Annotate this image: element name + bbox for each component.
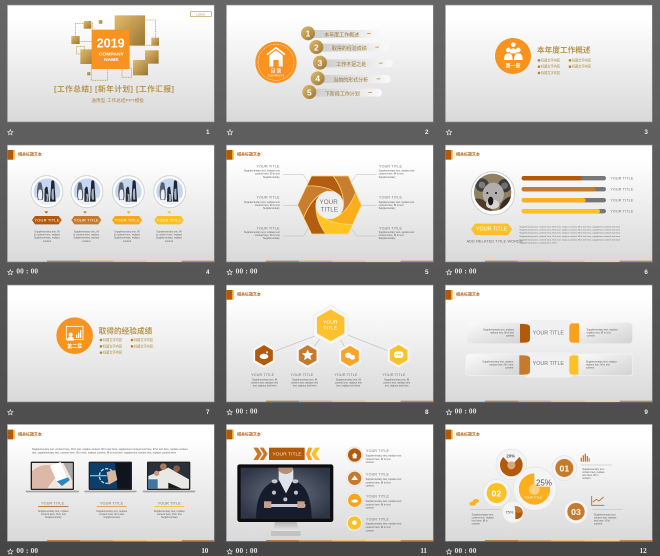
icon list: content here, fill in text: [366, 503, 391, 506]
slide 4: four penguin circles: 4: [206, 269, 210, 276]
slide header: 相关标题文本: [456, 291, 480, 297]
slide header: 相关标题文本: [237, 151, 261, 157]
right labels: Supplementary: [379, 176, 396, 179]
connector lines: [283, 175, 377, 236]
slide 6: koala and progress bars: 00 : 00: [455, 267, 477, 276]
title badges: YOUR TITLE: [156, 218, 182, 223]
badge 03: 03: [571, 507, 581, 517]
description text: Supplementary text, fill: [114, 231, 140, 234]
bottom row panels: replace text, fill in text: [489, 363, 514, 366]
title badges: YOUR TITLE: [74, 218, 99, 223]
logo tag: LOGO: [196, 12, 206, 16]
child labels: content text, replace text: [383, 382, 410, 385]
slide 7: chapter two: [7, 285, 214, 416]
75 percent pie: 75%: [505, 509, 514, 514]
cover subtitle: 通用型·工作总结PPT模板: [91, 97, 144, 104]
cover title: [工作总结] [新年计划] [工作汇报]: [54, 83, 174, 93]
text block 02: content: [472, 523, 480, 526]
chapter bullet list: 标题文字内容: [103, 337, 123, 342]
slide header: [445, 150, 480, 160]
25 percent pie: [513, 467, 557, 510]
add related title text: ADD RELATED TITLE WORDS: [467, 240, 523, 244]
description text: Supplementary, replace: [114, 237, 141, 240]
child labels: YOUR TITLE: [334, 373, 358, 377]
child labels: [251, 373, 410, 388]
center title: YOUR: [320, 199, 338, 206]
orange cover square with year: [92, 30, 130, 69]
text block 01: text here, fill in: [582, 474, 599, 477]
laptop captions: Supplementary text, replace: [154, 510, 185, 513]
left labels: Supplementary: [263, 207, 280, 210]
text block 01: [581, 465, 612, 480]
bottom row panels: content: [586, 367, 594, 370]
chapter bullet list: 标题文字内容: [134, 343, 154, 348]
progress bars: [522, 176, 634, 214]
slide header: 相关标题文本: [18, 151, 42, 157]
list of contents: 工作不足之处: [336, 61, 366, 68]
bottom row panels: YOUR TITLE: [533, 361, 564, 367]
text block 03: [592, 509, 623, 526]
slide header: [445, 290, 480, 300]
right labels: [379, 164, 415, 240]
chapter bullet list: [538, 57, 592, 75]
slide 7: chapter two: 7: [206, 409, 210, 416]
top row panels: Supplementary text, replace: [587, 328, 618, 331]
text block 03: content: [594, 523, 602, 526]
list of contents: 下阶段工作计划: [325, 90, 360, 97]
description text: in content here, replace: [34, 234, 61, 237]
child labels: content text, replace text: [251, 382, 279, 385]
icon list: content: [366, 529, 374, 532]
slide 10: three laptops: 00 : 00: [16, 546, 38, 555]
right labels: Supplementary text, replace text: [379, 201, 415, 204]
laptop captions: Supplementary: [45, 516, 62, 519]
right labels: YOUR TITLE: [379, 164, 403, 168]
icon list: content here, fill in text: [366, 526, 391, 529]
slide 9: paired panels: 00 : 00: [455, 407, 477, 416]
slide 4: four penguin circles: 00 : 00: [16, 267, 38, 276]
slide header: 相关标题文本: [456, 430, 480, 436]
laptop captions: [38, 501, 185, 519]
child labels: text, replace text here: [385, 385, 409, 388]
description text: content: [165, 240, 173, 243]
yellow title badge: [471, 224, 512, 235]
child labels: text, replace text here: [253, 385, 277, 388]
list of contents: 当前的形式分析: [333, 77, 368, 84]
laptop 3: [143, 462, 195, 492]
child labels: text, replace text here: [293, 385, 317, 388]
25 percent pie: 25%: [536, 478, 552, 487]
chapter bullet list: [100, 337, 154, 355]
description text: content: [43, 240, 51, 243]
icon list: content: [366, 507, 374, 510]
slide 11: monitor and list: [226, 424, 433, 555]
center title: TITLE: [321, 207, 338, 214]
laptop captions: Supplementary text, replace: [38, 510, 69, 513]
paragraph: [519, 225, 621, 245]
slide 10: three laptops: [7, 424, 214, 555]
title badges: YOUR TITLE: [114, 218, 140, 223]
slide header: 相关标题文本: [237, 291, 261, 297]
icon list: Supplementary text, replace text: [366, 500, 402, 503]
contents badge with house icon: 目 录: [271, 68, 282, 75]
left labels: YOUR TITLE: [257, 196, 280, 200]
chapter bullet list: 标题文字内容: [541, 64, 561, 69]
logo tag: [190, 12, 211, 17]
list of contents: 取得的经验成绩: [332, 45, 367, 52]
chapter title: 取得的经验成绩: [99, 326, 153, 336]
laptop captions: YOUR TITLE: [100, 501, 124, 505]
icon list: [346, 447, 402, 532]
right labels: Supplementary: [379, 237, 396, 240]
slide 4: four penguin circles: [7, 145, 214, 276]
slide header: [7, 430, 42, 439]
slide 9: paired panels: [445, 285, 652, 416]
badge 01: [552, 456, 577, 480]
laptop 1: [26, 462, 79, 492]
intro paragraph: text, supplementary text, content here, fill in text, replace content, fill in text here, supplement content text, replace content here: [32, 451, 177, 454]
slide 5: pinwheel hexagon: 5: [425, 269, 429, 276]
laptop captions: content here, fill in text: [41, 513, 66, 516]
top row panels: YOUR TITLE: [533, 330, 564, 336]
slide 12: circle charts: [445, 424, 652, 555]
chapter bullet list: 标题文字内容: [541, 57, 561, 62]
left labels: Supplementary text, replace text: [244, 231, 280, 234]
child labels: Supplementary text, fill: [336, 378, 361, 381]
title badges: [32, 211, 184, 224]
text block 01: Supplementary text,: [582, 468, 605, 471]
chapter bullet list: 标题文字内容: [572, 57, 592, 62]
child labels: YOUR TITLE: [251, 373, 275, 377]
paragraph: Supplementary text, content here, fill in text, replace content, fill in text here, supplement content text here: [519, 228, 621, 231]
koala photo circle: [471, 172, 515, 215]
description text: in content here, replace: [156, 234, 183, 237]
icon list: YOUR TITLE: [366, 495, 390, 499]
20 percent pie: 20%: [506, 453, 515, 458]
paragraph: Supplementary text, content here, fill in text, replace content, fill in text here, supplement content text here: [519, 238, 621, 241]
progress bars: YOUR TITLE: [610, 210, 634, 214]
text block 01: content text, replace: [582, 471, 605, 474]
icon list: content here, fill in text: [366, 481, 391, 484]
top hexagon: TITLE: [324, 326, 338, 332]
right labels: Supplementary text, replace text: [379, 170, 415, 173]
left labels: content here, fill in text: [255, 173, 280, 176]
child labels: YOUR TITLE: [290, 373, 314, 377]
laptop captions: YOUR TITLE: [41, 501, 65, 505]
progress bars: YOUR TITLE: [610, 177, 634, 181]
slide 1: cover: [7, 5, 214, 136]
top row panels: content: [587, 335, 595, 338]
description text: content: [123, 240, 131, 243]
slide 5: pinwheel hexagon: 00 : 00: [236, 267, 258, 276]
list of contents: 1: [306, 29, 311, 39]
chapter bullet list: 标题文字内容: [103, 350, 123, 355]
hexagon pinwheel: [298, 176, 361, 234]
chapter bullet list: 标题文字内容: [134, 337, 154, 342]
badge 03: [564, 500, 588, 524]
slide 5: pinwheel hexagon: [226, 145, 433, 276]
orange cover square with year: COMPANY: [99, 51, 125, 57]
child labels: content text, replace text: [335, 382, 362, 385]
progress bars: YOUR TITLE: [610, 198, 634, 202]
slide 10: three laptops: 10: [201, 547, 209, 555]
slide 6: koala and progress bars: 6: [644, 269, 648, 276]
left labels: YOUR TITLE: [257, 164, 280, 168]
description text: content: [82, 240, 91, 243]
icon list: Supplementary text, replace text: [366, 455, 402, 458]
icon list: YOUR TITLE: [366, 517, 390, 521]
description text: Supplementary, replace: [73, 237, 100, 240]
chapter badge with people icon: 第一章: [506, 63, 520, 70]
slide 6: koala and progress bars: [445, 145, 652, 276]
center title: [320, 199, 338, 214]
child labels: text, replace text here: [336, 385, 361, 388]
orange cover square with year: NAME: [104, 57, 119, 63]
left labels: YOUR TITLE: [257, 226, 280, 230]
slide 11: monitor and list: 11: [420, 547, 427, 555]
slide 3: chapter one: [445, 5, 652, 136]
chapter bullet list: 标题文字内容: [541, 70, 561, 75]
laptop captions: YOUR TITLE: [158, 501, 181, 505]
slide 11: monitor and list: 00 : 00: [236, 546, 258, 555]
icon list: content: [366, 461, 374, 464]
slide 2: contents: [226, 5, 433, 136]
chapter title: 本年度工作概述: [537, 45, 591, 55]
slide 8: hexagon hierarchy: [226, 285, 433, 416]
description text: Supplementary text, fill: [74, 231, 99, 234]
right labels: content here, fill in text: [379, 204, 404, 207]
icon: bar chart: [581, 454, 590, 462]
laptop captions: Supplementary: [161, 516, 178, 519]
child labels: content text, replace text: [291, 382, 318, 385]
list of contents: 本年度工作概述: [324, 32, 359, 39]
top hexagon: YOUR: [323, 320, 338, 326]
paragraph: Supplementary text, content here, fill in text, replace content, fill in text here, supplement content text here: [519, 232, 621, 235]
top row panels: [467, 321, 632, 347]
laptop captions: content here, fill in text: [99, 513, 124, 516]
badge 02: 02: [492, 488, 501, 498]
chapter badge with chart icon: [56, 317, 93, 354]
top hexagon: [313, 305, 348, 345]
bottom row panels: replace text, fill in text: [586, 363, 610, 366]
chapter badge with chart icon: 第二章: [67, 343, 82, 350]
icon list: content here, fill in text: [366, 458, 391, 461]
description text: Supplementary text, fill: [156, 231, 182, 234]
right labels: Supplementary text, replace text: [379, 231, 415, 234]
child labels: YOUR TITLE: [382, 373, 406, 377]
laptop 2: [84, 462, 137, 492]
slide 8: hexagon hierarchy: 8: [425, 409, 429, 416]
text block 01: content: [582, 477, 591, 480]
icon: coins: [469, 499, 479, 506]
top row panels: replace text, fill in text: [490, 331, 514, 334]
left labels: Supplementary: [263, 176, 280, 179]
yellow title badge: YOUR TITLE: [476, 227, 508, 233]
chapter bullet list: 标题文字内容: [572, 64, 592, 69]
text block 02: text here, fill in: [472, 519, 488, 522]
bottom row panels: Supplementary text, replace: [586, 360, 618, 363]
slide header: 相关标题文本: [456, 151, 480, 157]
text block 02: content text, replace: [472, 516, 495, 519]
text block 02: [470, 509, 501, 526]
slide 8: hexagon hierarchy: 00 : 00: [236, 407, 258, 416]
left labels: Supplementary text, replace text: [244, 201, 280, 204]
list of contents: 3: [318, 58, 323, 68]
slide 2: contents: 2: [425, 129, 429, 136]
top row panels: replace text, fill in text: [587, 331, 611, 334]
left labels: content here, fill in text: [255, 204, 280, 207]
top row panels: Supplementary text, replace: [483, 328, 515, 331]
text block 03: text here, fill in: [594, 519, 611, 522]
intro paragraph: Supplementary text, content here, fill in text, replace content, fill in text here, supplement content text here, fill in text here, replace content: [32, 448, 188, 451]
description text: in content here, replace: [114, 234, 141, 237]
laptop captions: content here, fill in text: [157, 513, 182, 516]
left labels: Supplementary text, replace text: [244, 170, 280, 173]
right labels: content here, fill in text: [379, 173, 404, 176]
chapter bullet list: 标题文字内容: [103, 343, 123, 348]
right labels: YOUR TITLE: [379, 226, 403, 230]
paragraph: Supplementary text, content here, fill in: [519, 242, 557, 245]
contents badge with house icon: [255, 42, 297, 83]
child labels: Supplementary text, fill: [384, 378, 410, 381]
child labels: Supplementary text, fill: [292, 378, 318, 381]
slide header: [226, 150, 261, 160]
bottom row panels: Supplementary text, replace: [482, 360, 514, 363]
icon list: content: [366, 485, 374, 488]
icon: line chart: [592, 496, 604, 505]
slide 12: circle charts: 00 : 00: [455, 546, 477, 555]
description text: [34, 231, 183, 243]
25 percent pie: YOUR TITLE: [524, 496, 542, 500]
slide 1: cover: 1: [206, 129, 210, 136]
title badges: YOUR TITLE: [34, 218, 60, 223]
text block 03: Supplementary text,: [594, 513, 616, 516]
title banner with chevrons: YOUR TITLE: [272, 452, 302, 458]
slide 9: paired panels: 9: [644, 409, 648, 416]
top row panels: content: [506, 335, 514, 338]
intro paragraph: [32, 448, 188, 454]
monitor with businessman: [237, 463, 333, 536]
left labels: content here, fill in text: [255, 234, 280, 237]
icon list: Supplementary text, replace text: [366, 523, 402, 526]
title banner with chevrons: [253, 448, 320, 460]
contents badge with house icon: CONTENTS: [268, 73, 284, 77]
paragraph: Supplementary text, content here, fill in text, replace content, fill in text here, supplement content text here: [519, 225, 621, 228]
icon list: YOUR TITLE: [366, 449, 390, 453]
right labels: Supplementary: [379, 207, 396, 210]
left labels: [244, 164, 280, 240]
chapter badge with people icon: [495, 38, 531, 74]
list of contents: 4: [315, 74, 320, 84]
75 percent pie: [502, 501, 524, 523]
badge 01: 01: [560, 463, 569, 473]
bottom row panels: [466, 352, 633, 378]
orange cover square with year: 2019: [97, 36, 125, 50]
slide header: 相关标题文本: [18, 430, 42, 436]
laptop captions: Supplementary: [103, 516, 121, 519]
icon list: YOUR TITLE: [366, 473, 390, 477]
badge 02: [483, 479, 510, 507]
left labels: Supplementary: [263, 237, 280, 240]
description text: Supplementary text, fill: [34, 231, 60, 234]
slide header: [226, 290, 261, 300]
description text: Supplementary, replace: [34, 237, 61, 240]
20 percent pie: [496, 449, 527, 480]
list of contents: 5: [307, 87, 312, 97]
bottom row panels: content: [505, 367, 514, 370]
slide header: [7, 150, 42, 160]
slide 3: chapter one: 3: [644, 129, 648, 136]
progress bars: YOUR TITLE: [610, 188, 634, 192]
icon list: Supplementary text, replace text: [366, 478, 402, 481]
slide header: [445, 430, 480, 439]
text block 03: content text, replace: [594, 516, 617, 519]
paragraph: Supplementary text, content here, fill in text, replace content, fill in text here, supplement content text here: [519, 235, 621, 238]
child hexagon icons: [253, 342, 410, 369]
connector lines: [264, 330, 399, 356]
child labels: Supplementary text, fill: [252, 378, 278, 381]
list of contents: [301, 26, 393, 99]
right labels: content here, fill in text: [379, 234, 404, 237]
slide header: 相关标题文本: [237, 430, 261, 436]
description text: in content here, replace: [73, 234, 100, 237]
photo circles: [31, 176, 186, 208]
slide 12: circle charts: 12: [640, 547, 647, 555]
right labels: YOUR TITLE: [379, 196, 403, 200]
list of contents: 2: [314, 42, 319, 52]
text block 02: Supplementary text,: [472, 513, 494, 516]
slide header: [226, 430, 261, 439]
laptop captions: Supplementary text, replace: [96, 510, 128, 513]
description text: Supplementary, replace: [156, 237, 183, 240]
